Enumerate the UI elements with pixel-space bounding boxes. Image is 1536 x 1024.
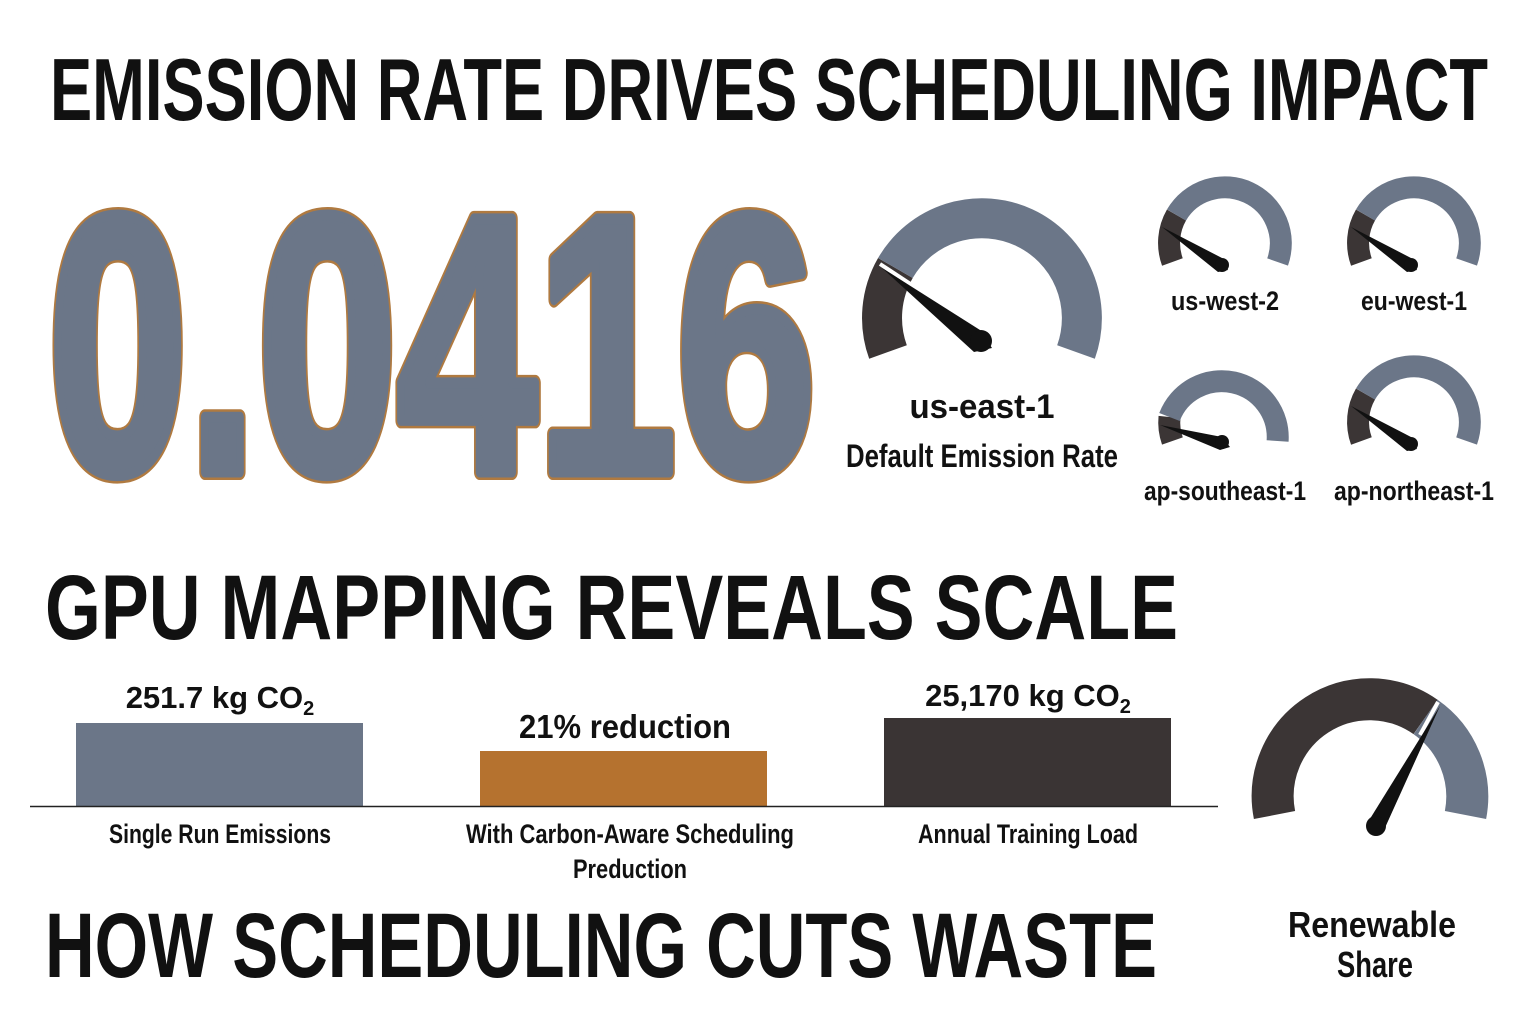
bar: annual (884, 718, 1171, 806)
value: 25,170: 25,170 kg CO (925, 678, 1120, 713)
label: us-east-1: us-east-1 (910, 388, 1054, 426)
value: 251.7: 2 (303, 698, 314, 720)
value: 25,170: 2 (1120, 696, 1131, 718)
label: renewable share (1288, 904, 1456, 985)
value: 251.7: 251.7 kg CO (126, 680, 303, 715)
gauge: ap-southeast-1 (1160, 381, 1278, 450)
bar chart (30, 678, 1218, 884)
gauge: us-west-2 (1162, 187, 1281, 272)
gauge: eu-west-1 (1351, 187, 1470, 272)
bar: carbon-aware (480, 751, 767, 806)
label: preduction: Preduction (573, 854, 687, 884)
label: renewable share: Renewable (1288, 904, 1456, 945)
big number: 0.0416 (48, 139, 816, 550)
label: ap-southeast-1: ap-southeast-1 (1144, 476, 1306, 506)
big number: 0.0416 (48, 139, 816, 550)
label: default emission rate: Default Emission Rate (846, 438, 1118, 474)
label: us-west-2: us-west-2 (1171, 286, 1279, 316)
label: single run: Single Run Emissions (109, 819, 331, 849)
value: 21%: 21% reduction (519, 708, 731, 745)
title: how scheduling: HOW SCHEDULING CUTS WASTE (45, 895, 1157, 997)
bar: single run (76, 723, 363, 806)
label: eu-west-1: eu-west-1 (1361, 286, 1467, 316)
gauge: us-east-1 (880, 218, 1082, 352)
label: renewable share: Share (1337, 944, 1413, 985)
label: carbon-aware: With Carbon-Aware Scheduling (466, 819, 794, 849)
big number (48, 139, 816, 550)
label: annual: Annual Training Load (918, 819, 1138, 849)
gauge: ap-northeast-1 (1351, 366, 1470, 451)
label: ap-northeast-1: ap-northeast-1 (1334, 476, 1494, 506)
gauge: renewable share (1273, 699, 1467, 836)
title: gpu mapping: GPU MAPPING REVEALS SCALE (45, 557, 1178, 659)
